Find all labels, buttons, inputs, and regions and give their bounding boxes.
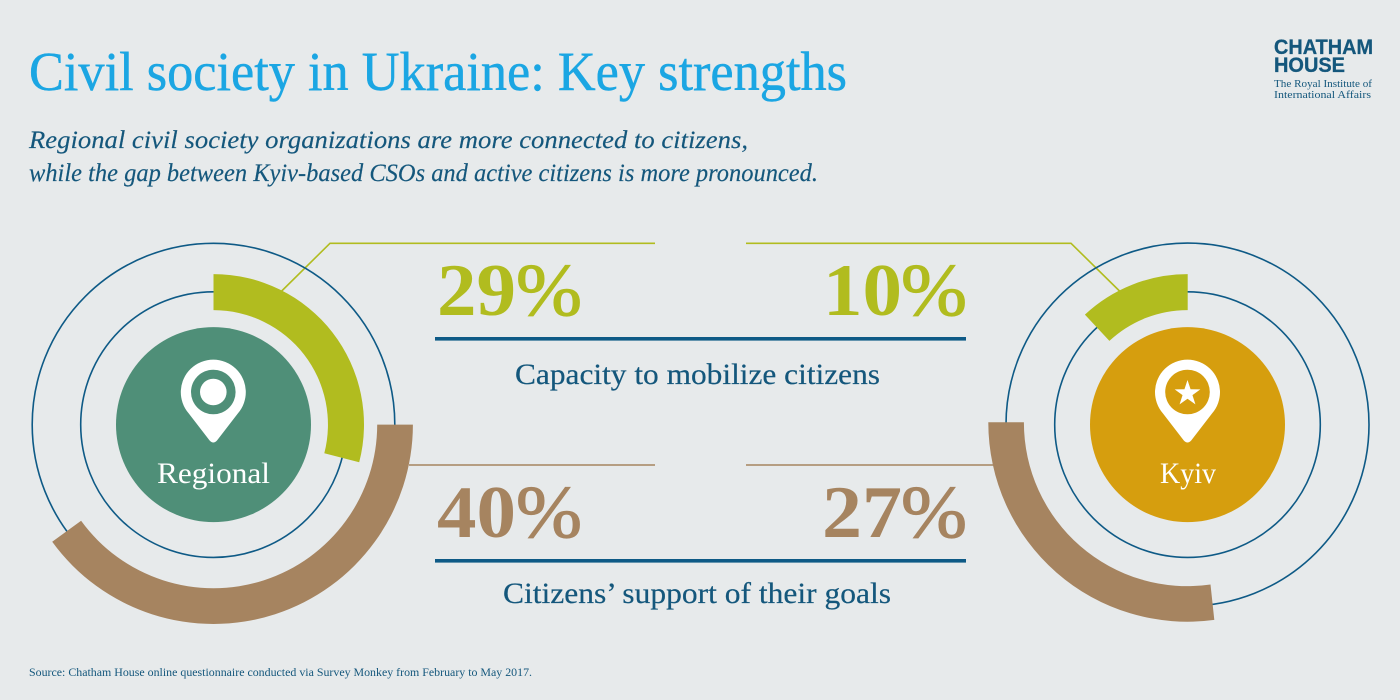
stat: regional 29%: 29	[437, 250, 516, 332]
title: Civil society in Ukraine: Key strengths	[29, 41, 847, 102]
subtitle	[28, 127, 818, 187]
label: Capacity to mobilize citizens	[515, 358, 880, 391]
arc: regional support 40%	[52, 425, 413, 624]
panel: kyiv donut	[746, 243, 1369, 622]
logo: Chatham House	[1274, 36, 1373, 101]
arc: regional capacity 29%	[214, 274, 364, 462]
connector: regional support line	[409, 464, 655, 466]
connector: kyiv capacity line	[746, 243, 1120, 291]
logo: Chatham House: HOUSE	[1274, 54, 1345, 77]
icon: regional map pin	[181, 360, 246, 442]
logo: Chatham House: The Royal Institute of	[1274, 78, 1372, 90]
subtitle: while the gap between Kyiv-based CSOs and active citizens is more pronounced.	[29, 160, 818, 187]
stat: kyiv 27%: %	[901, 472, 967, 554]
subtitle: Regional civil society organizations are more connected to citizens,	[28, 127, 748, 154]
arc: kyiv capacity 10%	[1085, 274, 1188, 341]
stat: regional 29%: %	[516, 250, 582, 332]
label: kyiv: Kyiv	[1160, 457, 1216, 490]
label: Citizens’ support of their goals	[503, 577, 891, 610]
stat: kyiv 10%	[823, 250, 967, 332]
stat: regional 40%	[437, 472, 582, 554]
source note: Source: Chatham House online questionnaire conducted via Survey Monkey from February to May 2017.	[29, 667, 532, 679]
stat block: citizens' support of their goals	[435, 472, 967, 610]
rings	[1006, 243, 1369, 606]
connector: kyiv support line	[746, 464, 995, 466]
rings	[32, 243, 395, 606]
stat: regional 40%: %	[516, 472, 582, 554]
logo: Chatham House: CHATHAM	[1274, 36, 1373, 59]
stat: kyiv 10%: 10	[823, 250, 902, 332]
stat: kyiv 10%: %	[901, 250, 967, 332]
stat: kyiv 27%: 27	[822, 472, 902, 554]
connector: regional capacity line	[282, 243, 655, 291]
stat: regional 40%: 40	[437, 472, 516, 554]
centre circle: regional	[116, 327, 311, 522]
stat: regional 29%	[437, 250, 582, 332]
icon: kyiv map pin with star	[1155, 360, 1220, 442]
arc: kyiv support 27%	[988, 422, 1214, 622]
stat block: capacity to mobilize citizens	[435, 250, 967, 391]
stat: kyiv 27%	[822, 472, 967, 554]
logo: Chatham House: International Affairs	[1274, 89, 1371, 101]
rule	[435, 559, 966, 563]
panel: regional donut	[32, 243, 655, 624]
centre circle: kyiv	[1090, 327, 1285, 522]
rule	[435, 337, 966, 341]
label: regional: Regional	[157, 457, 270, 490]
